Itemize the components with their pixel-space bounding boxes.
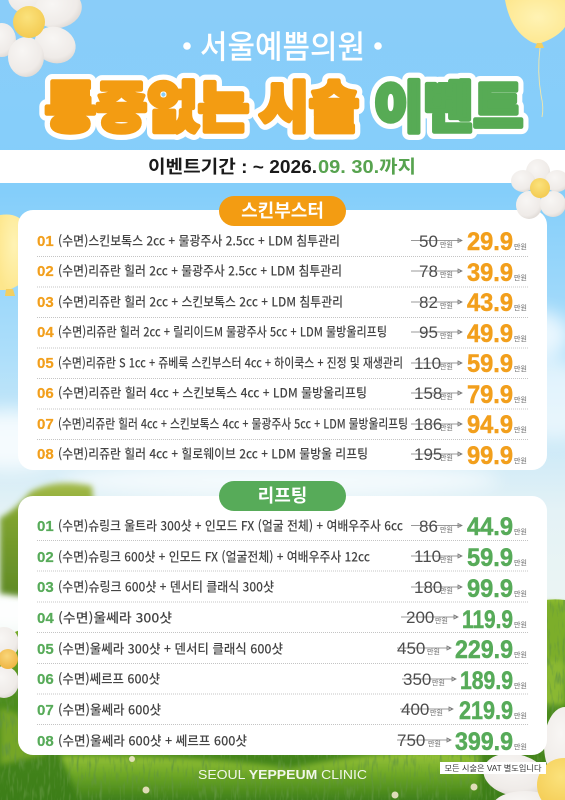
VAT note <box>440 762 546 774</box>
row 07: 만원 <box>440 423 453 432</box>
panel: skin booster <box>18 210 547 470</box>
row 04: 95 <box>419 323 438 342</box>
row 08: 만원 <box>440 453 453 462</box>
row 04: 만원 <box>514 334 527 343</box>
row 04: (수면)리쥬란 힐러 2cc + 릴리이드M 물광주사 5cc + LDM 물방울리프팅 <box>58 322 387 340</box>
row 03: 99.9 <box>467 575 513 603</box>
row 08 <box>37 442 527 470</box>
row 07: 만원 <box>514 425 527 434</box>
row 03: (수면)슈링크 600샷 + 덴서티 클래식 300샷 <box>58 576 274 596</box>
row 06: 158 <box>414 384 442 403</box>
row 01: 44.9 <box>467 513 513 541</box>
row 05: 05 <box>37 641 54 658</box>
row 01: 만원 <box>440 240 453 249</box>
row 06: (수면)리쥬란 힐러 4cc + 스킨보톡스 4cc + LDM 물방울리프팅 <box>58 382 367 402</box>
row 03 <box>37 289 527 317</box>
row 02: 110 <box>414 547 441 566</box>
subtitle: 서울예쁨의원 <box>200 22 365 68</box>
row 01: 86 <box>419 517 438 536</box>
row 05 <box>37 636 527 664</box>
row 02: (수면)리쥬란 힐러 2cc + 물광주사 2.5cc + LDM 침투관리 <box>58 260 342 280</box>
row 07: 만원 <box>430 708 443 717</box>
row 08: 08 <box>37 446 54 463</box>
background: grass hills <box>0 599 565 800</box>
row 01 <box>37 513 527 541</box>
row 01: 만원 <box>440 525 453 534</box>
row 07: 186 <box>414 415 442 434</box>
row 06: 189.9 <box>460 667 513 695</box>
subtitle dot left <box>183 42 191 50</box>
row 06: 350 <box>403 670 431 689</box>
row 07: 219.9 <box>459 697 513 725</box>
row 02: 59.9 <box>467 544 513 572</box>
row 03: 만원 <box>440 301 453 310</box>
illustration: top-right balloon <box>505 0 565 117</box>
row 05: 450 <box>397 639 425 658</box>
row 05: 05 <box>37 355 54 372</box>
row 06: 79.9 <box>467 381 513 409</box>
row 04: 04 <box>37 324 54 341</box>
row 08: 08 <box>37 733 54 750</box>
heading pill: skin booster: 스킨부스터 <box>241 197 324 223</box>
title: 이벤트 <box>374 63 523 143</box>
row 02: 만원 <box>440 555 453 564</box>
illustration: left balloon <box>0 214 26 296</box>
row 04: 만원 <box>514 620 527 629</box>
row 07: 400 <box>401 700 429 719</box>
row 08: (수면)리쥬란 힐러 4cc + 힐로웨이브 2cc + LDM 물방울 리프팅 <box>58 444 368 462</box>
illustration: bottom-right flower <box>479 707 565 800</box>
illustration: left lower flower <box>0 627 19 698</box>
panel: lifting <box>18 496 547 756</box>
row 07: 94.9 <box>467 411 513 439</box>
VAT note: 모든 시술은 VAT 별도입니다 <box>444 763 542 773</box>
row 05: 만원 <box>440 362 453 371</box>
row 06: 만원 <box>440 392 453 401</box>
event period panel: 이벤트기간 : ~ 2026. <box>148 157 317 177</box>
title: 시술 <box>259 63 359 143</box>
heading pill: skin booster <box>219 196 346 226</box>
row 02: 만원 <box>514 558 527 567</box>
row 02: 39.9 <box>467 259 513 287</box>
row 03: 180 <box>414 578 442 597</box>
row 04: 만원 <box>435 616 448 625</box>
row 05: (수면)리쥬란 S 1cc + 쥬베룩 스킨부스터 4cc + 하이쿡스 + 진정 및 재생관리 <box>58 352 403 372</box>
row 06: 만원 <box>514 395 527 404</box>
row 01: (수면)슈링크 울트라 300샷 + 인모드 FX (얼굴 전체) + 여배우주사 6cc <box>58 516 403 534</box>
row 08: 399.9 <box>455 728 513 756</box>
row 06: 만원 <box>432 678 445 687</box>
row 07 <box>37 411 527 439</box>
row 01: 만원 <box>514 242 527 251</box>
row 04: 49.9 <box>467 320 513 348</box>
row 03: 43.9 <box>467 289 513 317</box>
row 03: 82 <box>419 293 438 312</box>
row 01: 01 <box>37 233 54 250</box>
row 05: 110 <box>414 354 441 373</box>
row 06: 만원 <box>514 681 527 690</box>
row 03: (수면)리쥬란 힐러 2cc + 스킨보톡스 2cc + LDM 침투관리 <box>58 292 343 310</box>
row 08: 만원 <box>428 739 441 748</box>
illustration: tiny meadow flowers <box>129 756 478 798</box>
row 03: 만원 <box>514 303 527 312</box>
row 08 <box>37 728 527 756</box>
row 08: 만원 <box>514 742 527 751</box>
row 04: 만원 <box>440 331 453 340</box>
illustration: right small flower <box>511 159 565 219</box>
row 06: 06 <box>37 671 54 688</box>
row 01: 50 <box>419 232 438 251</box>
row 06: 06 <box>37 385 54 402</box>
row 06: (수면)쎄르프 600샷 <box>58 668 160 688</box>
row 02: 02 <box>37 549 54 566</box>
row 03 <box>37 575 527 603</box>
row 05: 59.9 <box>467 350 513 378</box>
row 04: 200 <box>406 608 434 627</box>
row 06 <box>37 381 527 409</box>
row 03: 03 <box>37 294 54 311</box>
heading pill: lifting <box>219 481 346 511</box>
row 07: 07 <box>37 416 54 433</box>
row 07: (수면)울쎄라 600샷 <box>58 700 161 718</box>
row 01: (수면)스킨보톡스 2cc + 물광주사 2.5cc + LDM 침투관리 <box>58 230 340 250</box>
row 02: 만원 <box>440 270 453 279</box>
row 07: (수면)리쥬란 힐러 4cc + 스킨보톡스 4cc + 물광주사 5cc + LDM 물방울리프팅 <box>58 414 408 432</box>
title: 시술 <box>259 63 359 143</box>
row 04 <box>37 606 527 634</box>
row 02 <box>37 544 527 572</box>
row 07: 07 <box>37 702 54 719</box>
row 02 <box>37 259 527 287</box>
row 08: 195 <box>414 445 442 464</box>
row 03: 만원 <box>440 586 453 595</box>
background: clouds <box>0 311 565 632</box>
row 06 <box>37 667 527 695</box>
row 01: 만원 <box>514 527 527 536</box>
row 05: (수면)울쎄라 300샷 + 덴서티 클래식 600샷 <box>58 638 283 658</box>
row 08: 750 <box>397 731 425 750</box>
event period panel <box>0 150 565 183</box>
row 03: 만원 <box>514 589 527 598</box>
row 05 <box>37 350 527 378</box>
row 04: 04 <box>37 610 54 627</box>
row 05: 만원 <box>514 650 527 659</box>
row 07 <box>37 697 527 725</box>
row 05: 만원 <box>427 647 440 656</box>
row 07: 만원 <box>514 711 527 720</box>
row 08: 만원 <box>514 456 527 465</box>
title: 통증없는 <box>45 63 249 143</box>
title: 통증없는 <box>45 63 249 143</box>
row 04: 119.9 <box>462 606 513 634</box>
row 04: (수면)울쎄라 300샷 <box>58 608 172 626</box>
background: sky <box>0 0 565 640</box>
row 02: 02 <box>37 263 54 280</box>
row 01: 01 <box>37 518 54 535</box>
row 01: 29.9 <box>467 228 513 256</box>
illustration: tree <box>0 483 95 596</box>
row 02: 78 <box>419 262 438 281</box>
footer brand: SEOUL YEPPEUM CLINIC <box>198 767 367 782</box>
row 01 <box>37 228 527 256</box>
row 05: 229.9 <box>455 636 513 664</box>
row 08: (수면)울쎄라 600샷 + 쎄르프 600샷 <box>58 730 247 750</box>
event period panel: 09. 30.까지 <box>318 157 416 177</box>
row 03: 03 <box>37 579 54 596</box>
row 04 <box>37 320 527 348</box>
heading pill: lifting: 리프팅 <box>258 482 307 508</box>
row 05: 만원 <box>514 364 527 373</box>
row 02: 만원 <box>514 273 527 282</box>
title: 이벤트 <box>374 63 523 143</box>
subtitle dot right <box>374 42 382 50</box>
row 02: (수면)슈링크 600샷 + 인모드 FX (얼굴전체) + 여배우주사 12cc <box>58 546 370 566</box>
title <box>45 63 523 143</box>
illustration: top-left flower <box>0 0 85 77</box>
row 08: 99.9 <box>467 442 513 470</box>
